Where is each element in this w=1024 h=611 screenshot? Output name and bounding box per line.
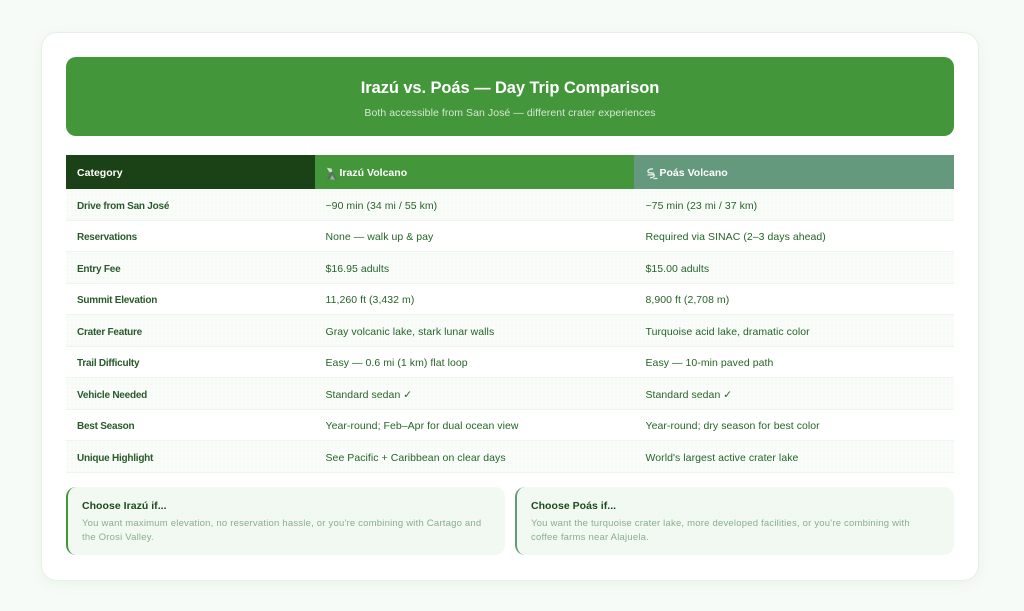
title: Irazú vs. Poás — Day Trip Comparison (361, 79, 659, 97)
row: Reservations: None — walk up & pay (326, 231, 433, 243)
callout text (531, 518, 910, 543)
row: Drive from San José: ~75 min (23 mi / 37 km) (646, 200, 757, 212)
row: Trail Difficulty: Easy — 0.6 mi (1 km) flat loop (326, 357, 468, 369)
callout text: the Orosi Valley. (82, 532, 154, 543)
subtitle: Both accessible from San José — different crater experiences (364, 107, 656, 119)
row: Crater Feature: Gray volcanic lake, stark lunar walls (326, 326, 494, 338)
row: Unique Highlight (66, 441, 954, 472)
row: Crater Feature (66, 315, 954, 346)
column header: Poás Volcano (634, 155, 954, 189)
callout: Choose Poás (515, 487, 954, 555)
row: Entry Fee (66, 252, 954, 284)
row: Vehicle Needed: Standard sedan ✓ (646, 388, 732, 400)
row: Reservations (66, 220, 954, 252)
icon: crater lake (647, 168, 658, 180)
callout text: coffee farms near Alajuela. (531, 532, 649, 543)
row: Vehicle Needed (66, 378, 954, 410)
column header: Poás Volcano: Poás Volcano (660, 167, 728, 179)
row: Summit Elevation: Summit Elevation (77, 295, 157, 306)
row: Summit Elevation: 8,900 ft (2,708 m) (646, 294, 729, 306)
callout text: You want maximum elevation, no reservation hassle, or you're combining with Cartago and (82, 518, 481, 529)
callout text: You want the turquoise crater lake, more developed facilities, or you're combining with (531, 518, 910, 529)
row: Best Season: Year-round; Feb–Apr for dual ocean view (326, 420, 519, 432)
callout text (82, 518, 481, 543)
row: Summit Elevation (66, 284, 954, 315)
row: Reservations: Reservations (77, 232, 137, 243)
row: Trail Difficulty: Easy — 10-min paved path (646, 357, 773, 369)
row: Crater Feature: Crater Feature (77, 326, 142, 338)
row: Drive from San José: Drive from San José (77, 200, 169, 212)
comparison table (66, 155, 954, 473)
callout heading: Choose Poás if... (531, 500, 616, 512)
callout: Choose Irazú (66, 487, 505, 555)
row: Drive from San José (66, 189, 954, 220)
row: Best Season: Best Season (77, 421, 134, 432)
column header: category: Category (77, 167, 123, 179)
header banner (66, 57, 954, 136)
row: Trail Difficulty (66, 346, 954, 378)
row: Unique Highlight: World's largest active crater lake (646, 452, 798, 464)
callout heading: Choose Irazú if... (82, 500, 167, 512)
row: Reservations: Required via SINAC (2–3 days ahead) (646, 231, 826, 243)
row: Trail Difficulty: Trail Difficulty (77, 358, 139, 369)
row: Best Season: Year-round; dry season for best color (646, 420, 820, 432)
row: Unique Highlight: Unique Highlight (77, 452, 153, 464)
row: Unique Highlight: See Pacific + Caribbean on clear days (326, 452, 506, 464)
icon: volcano (326, 168, 338, 180)
row: Summit Elevation: 11,260 ft (3,432 m) (326, 294, 414, 306)
column header: Irazú Volcano: Irazú Volcano (340, 167, 407, 179)
row: Crater Feature: Turquoise acid lake, dramatic color (646, 326, 810, 338)
row: Entry Fee: $15.00 adults (646, 262, 709, 274)
row: Best Season (66, 410, 954, 441)
column header: category (66, 155, 315, 189)
row: Entry Fee: Entry Fee (77, 264, 120, 274)
row: Vehicle Needed: Vehicle Needed (77, 390, 147, 400)
row: Drive from San José: ~90 min (34 mi / 55 km) (326, 200, 437, 212)
row: Vehicle Needed: Standard sedan ✓ (326, 388, 412, 400)
row: Entry Fee: $16.95 adults (326, 262, 389, 274)
column header: Irazú Volcano (315, 155, 634, 189)
